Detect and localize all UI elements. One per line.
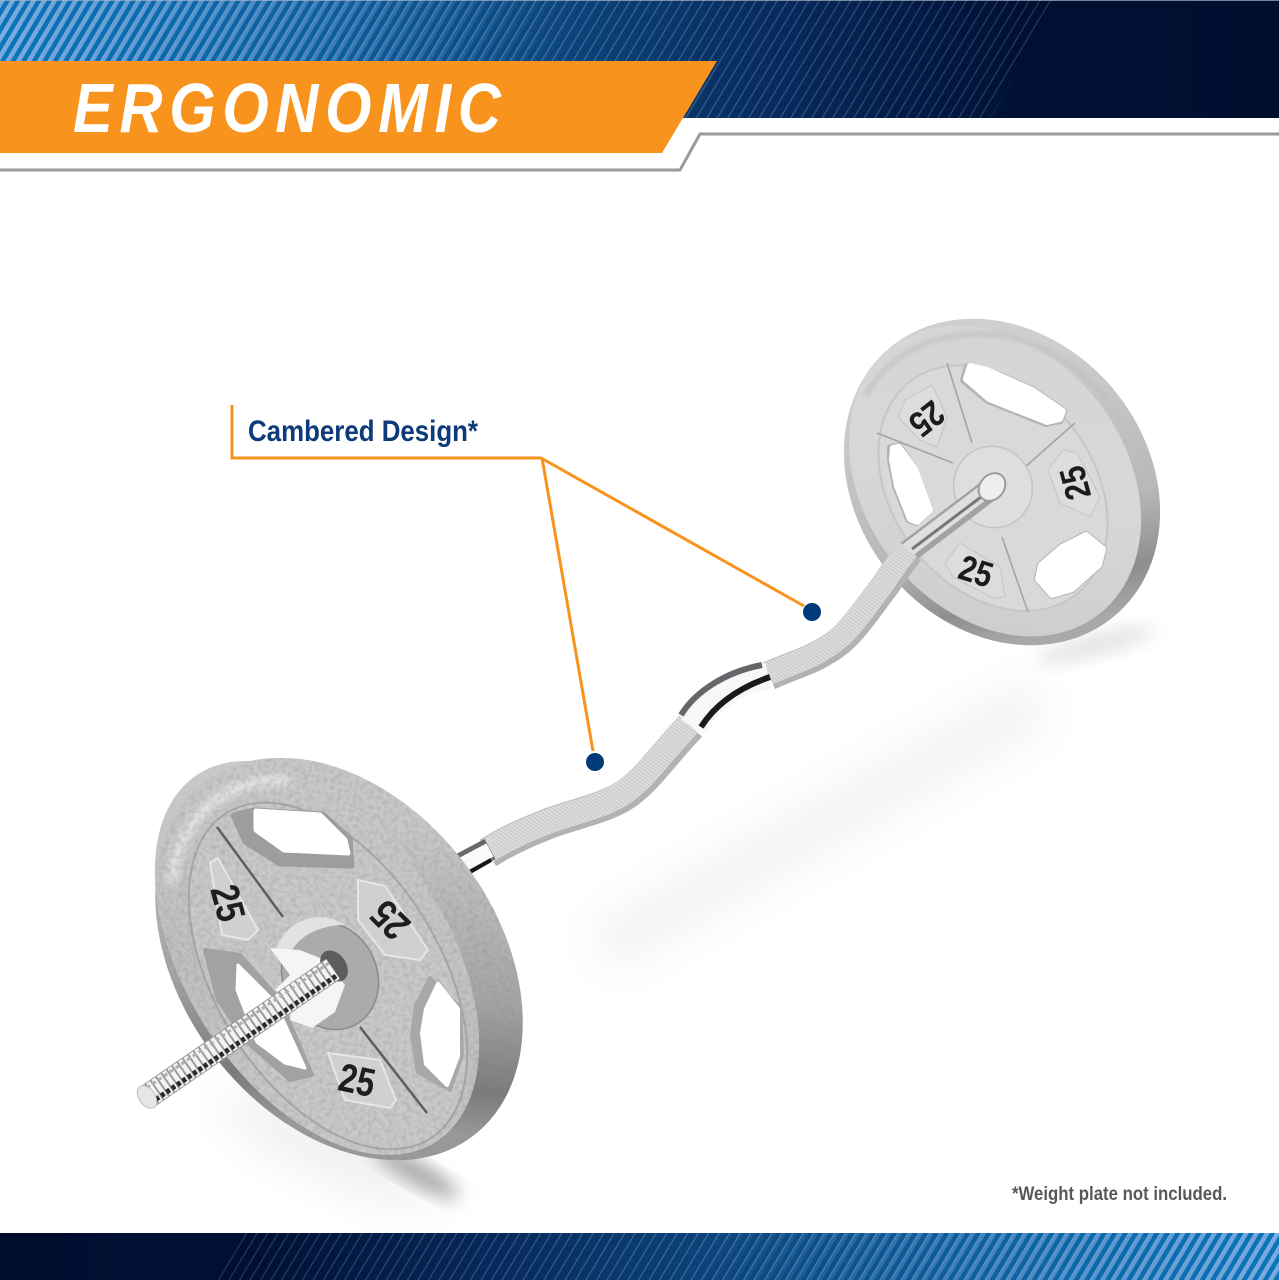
title banner xyxy=(0,61,717,153)
plate rim xyxy=(88,703,546,1213)
plate rim highlight xyxy=(172,780,285,880)
right sleeve xyxy=(905,468,1011,554)
shadows under barbell xyxy=(209,620,1156,1228)
plate window walls xyxy=(891,367,1103,595)
plate numerals: 25 xyxy=(202,880,254,926)
plate ribs xyxy=(217,827,427,1113)
footer band xyxy=(0,1233,1279,1280)
knurled grip xyxy=(487,549,910,853)
callout dot: lower xyxy=(586,753,604,771)
rod tip xyxy=(133,1082,161,1112)
plate casting grain xyxy=(79,687,599,1231)
plate hub xyxy=(940,433,1046,541)
right weight plate xyxy=(778,255,1226,709)
plate label pads xyxy=(898,385,1100,598)
plate rim shading xyxy=(866,334,1120,420)
left weight plate xyxy=(79,687,599,1231)
plate windows xyxy=(205,810,462,1090)
plate recess xyxy=(131,754,525,1198)
callout dot: upper xyxy=(803,603,821,621)
callout leader lines xyxy=(232,405,804,751)
callout: cambered design xyxy=(232,405,821,771)
star nut xyxy=(270,948,345,1028)
nut gap xyxy=(314,945,354,987)
plate numerals xyxy=(202,880,419,1106)
plate recess xyxy=(831,320,1155,656)
chrome centre section xyxy=(681,665,770,727)
footnote: *Weight plate not included. xyxy=(1012,1184,1227,1205)
callout label: Cambered Design* xyxy=(248,415,478,448)
plate windows xyxy=(892,366,1103,595)
plate edge xyxy=(79,687,599,1231)
hub highlight xyxy=(276,917,345,955)
plate rim xyxy=(789,268,1201,694)
plate numerals xyxy=(902,393,1099,595)
plate numerals: 25 xyxy=(335,1054,379,1106)
plate numerals: 25 xyxy=(902,393,952,445)
plate numerals: 25 xyxy=(1051,462,1099,504)
plate label pads xyxy=(210,858,428,1108)
chrome collar left xyxy=(460,849,491,872)
curl bar xyxy=(460,468,1011,872)
plate numerals: 25 xyxy=(954,547,998,595)
plate numerals: 25 xyxy=(361,891,419,949)
threaded rod xyxy=(133,963,336,1112)
plate hub xyxy=(264,906,396,1046)
header band xyxy=(0,0,1279,118)
plate edge xyxy=(778,255,1226,709)
white notch below band xyxy=(0,61,1279,168)
header outline xyxy=(0,134,1279,170)
title: ERGONOMIC xyxy=(73,68,508,147)
plate ribs xyxy=(877,363,1075,612)
